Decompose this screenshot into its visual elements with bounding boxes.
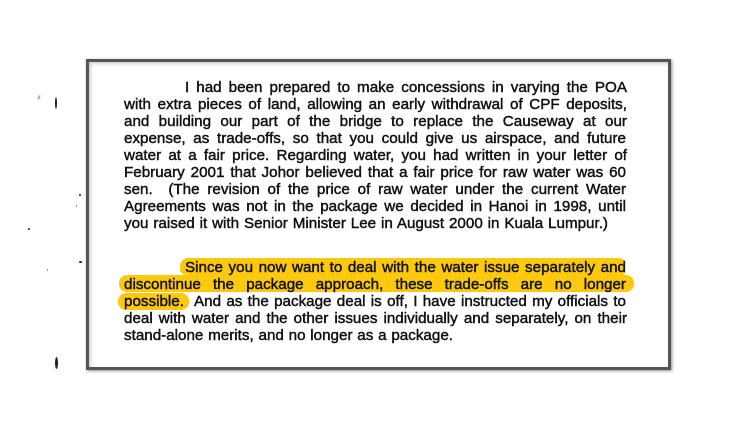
letter paragraph 2: And as the package deal is off, I have instructed my officials to — [194, 293, 626, 310]
document frame — [86, 59, 671, 370]
letter paragraph 2 — [124, 259, 628, 344]
letter paragraph 2: deal with water and the other issues individually and separately, on their — [124, 310, 627, 327]
letter paragraph 1: and building our part of the bridge to replace the Causeway at our — [124, 113, 627, 130]
letter paragraph 2: stand-alone merits, and no longer as a package. — [124, 327, 453, 344]
letter paragraph 1: with extra pieces of land, allowing an early withdrawal of CPF deposits, — [124, 96, 627, 113]
letter paragraph 1: expense, as trade-offs, so that you could give us airspace, and future — [124, 130, 626, 147]
letter paragraph 1: February 2001 that Johor believed that a fair price for raw water was 60 — [124, 164, 626, 181]
letter paragraph 2: Since you now want to deal with the water issue separately and — [185, 259, 626, 276]
yellow highlight — [118, 258, 634, 310]
letter paragraph 2: possible. — [124, 293, 184, 310]
letter paragraph 1: water at a fair price. Regarding water, you had written in your letter of — [124, 147, 627, 164]
letter paragraph 1: you raised it with Senior Minister Lee in August 2000 in Kuala Lumpur.) — [124, 215, 608, 232]
letter paragraph 1 — [124, 79, 628, 232]
scan specks in left margin — [28, 95, 82, 369]
letter paragraph 1: Agreements was not in the package we decided in Hanoi in 1998, until — [124, 198, 626, 215]
letter paragraph 1: sen. (The revision of the price of raw water under the current Water — [124, 181, 626, 198]
letter paragraph 1: I had been prepared to make concessions in varying the POA — [185, 79, 627, 96]
letter paragraph 2: discontinue the package approach, these trade-offs are no longer — [124, 276, 626, 293]
